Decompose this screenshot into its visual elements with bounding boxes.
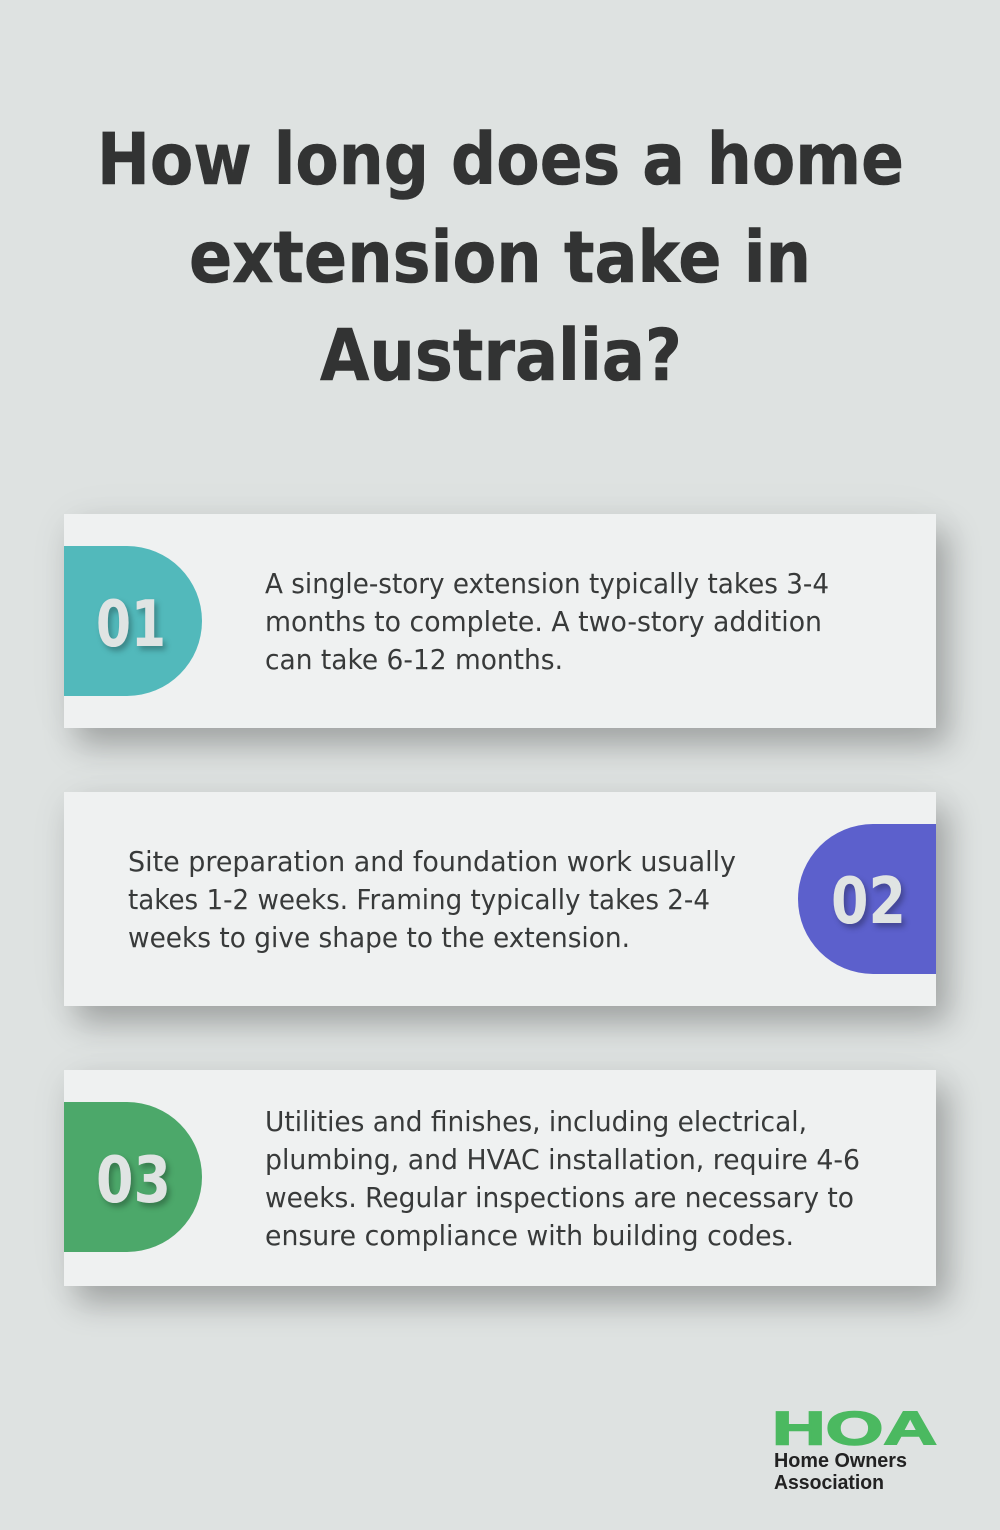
text block: step 01: A single-story extension typically takes 3-4 [265, 567, 829, 600]
text block: step 01: can take 6-12 months. [265, 643, 563, 676]
title: Australia? [320, 314, 682, 397]
icon: teal number badge 01: 01 [96, 588, 166, 662]
text block: step 03: plumbing, and HVAC installation, require 4-6 [265, 1143, 860, 1176]
panel: step 01 [64, 546, 829, 696]
text block: step 02 [128, 845, 736, 954]
text block: step 03: Utilities and finishes, including electrical, [265, 1105, 807, 1138]
text block: step 03: ensure compliance with building codes. [265, 1219, 794, 1252]
panel: step 02 [128, 824, 936, 974]
logo: HOA Home Owners Association: HOA [772, 1402, 937, 1454]
icon: green number badge 03: 03 [96, 1144, 171, 1218]
panel: card 1 background [64, 514, 936, 728]
text block: step 02: takes 1-2 weeks. Framing typically takes 2-4 [128, 883, 710, 916]
text block: step 02: weeks to give shape to the extension. [128, 921, 630, 954]
text block: step 03 [265, 1105, 860, 1252]
title: extension take in [189, 216, 811, 299]
icon: teal number badge 01 [64, 546, 202, 696]
panel: step 03 [64, 1102, 860, 1252]
text block: step 02: Site preparation and foundation work usually [128, 845, 736, 878]
title: How long does a home [97, 118, 904, 201]
text block: step 03: weeks. Regular inspections are necessary to [265, 1181, 854, 1214]
text block: step 01 [265, 567, 829, 676]
logo: HOA Home Owners Association: Association [774, 1472, 884, 1494]
logo: HOA Home Owners Association: Home Owners [774, 1450, 907, 1472]
text block: step 01: months to complete. A two-story addition [265, 605, 822, 638]
logo: HOA Home Owners Association [772, 1402, 937, 1494]
icon: indigo number badge 02: 02 [831, 865, 906, 939]
panel: card 3 background [64, 1070, 936, 1286]
icon: green number badge 03 [64, 1102, 202, 1252]
panel: card 2 background [64, 792, 936, 1006]
icon: indigo number badge 02 [798, 824, 936, 974]
title [97, 118, 904, 397]
